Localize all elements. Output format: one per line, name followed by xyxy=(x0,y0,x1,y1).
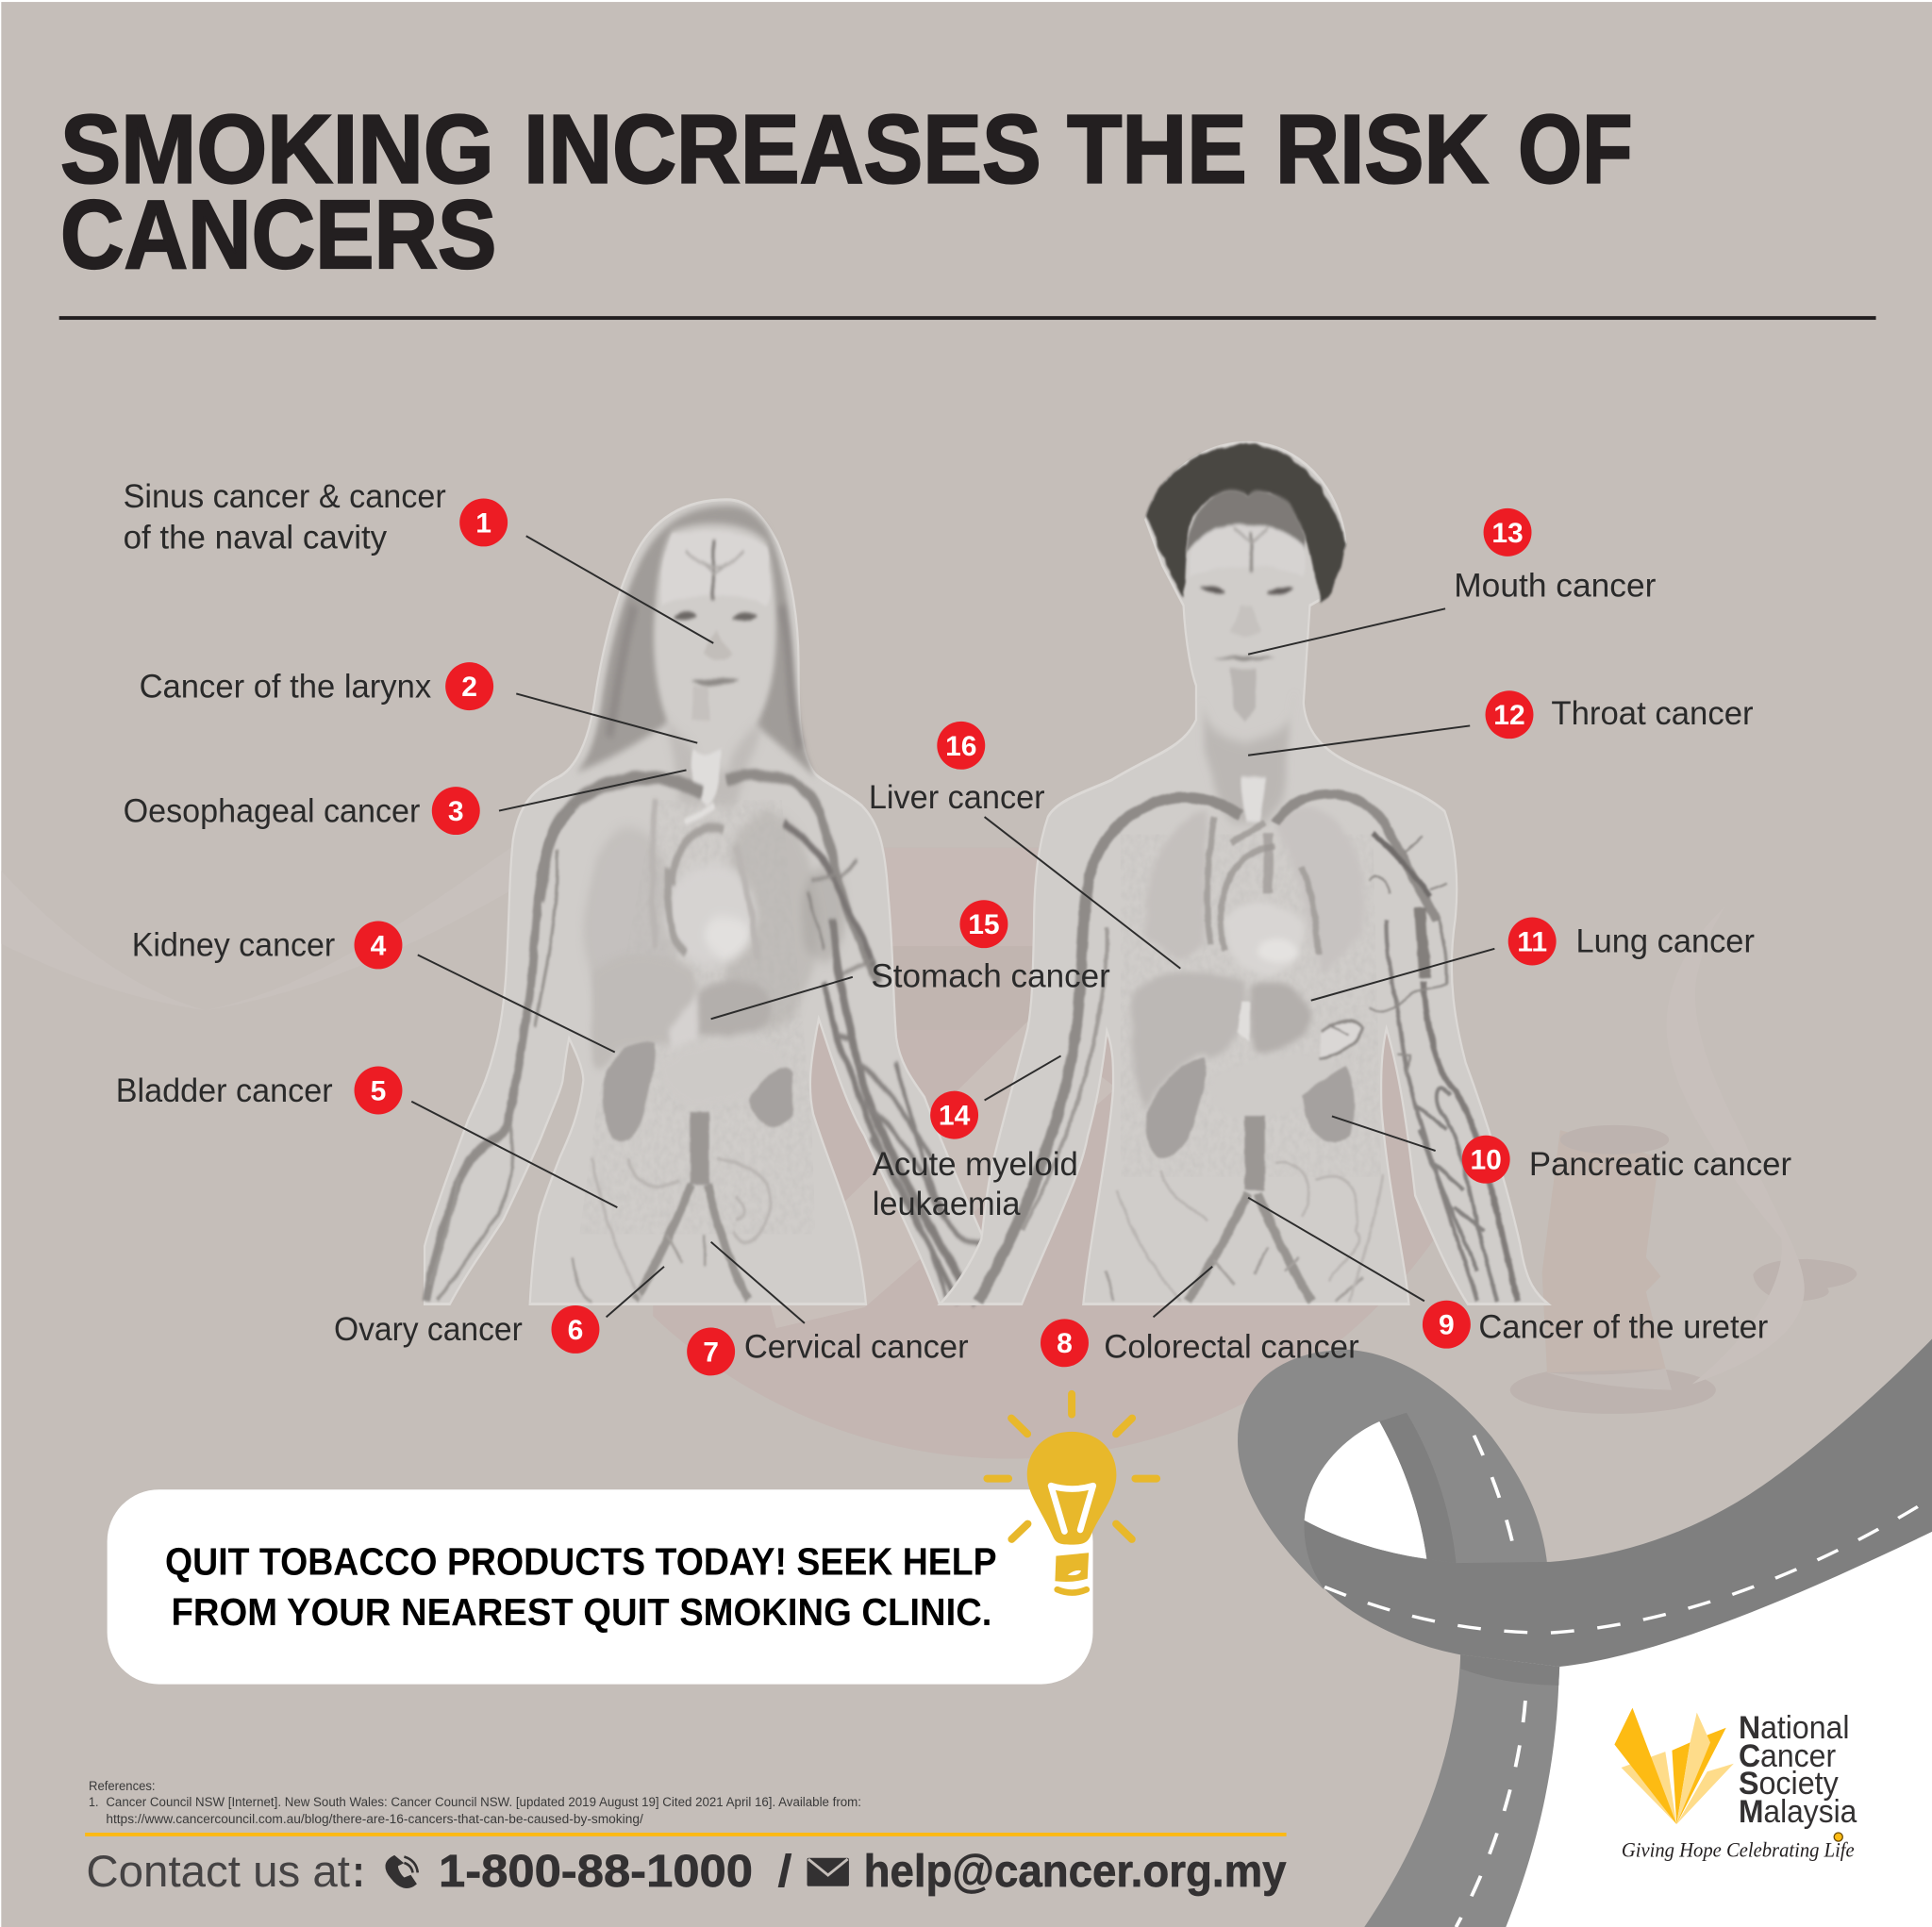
label 13: 13 xyxy=(1491,518,1524,549)
label 14: Acute myeloid xyxy=(873,1146,1078,1183)
lower road xyxy=(1364,1654,1559,1927)
label 5: 5 xyxy=(371,1075,386,1106)
male heart xyxy=(1224,903,1304,976)
male hair xyxy=(1146,443,1345,603)
label 13 xyxy=(1454,508,1657,604)
label 11: Lung cancer xyxy=(1576,923,1755,960)
road dashes xyxy=(1324,1436,1932,1927)
logo xyxy=(1614,1708,1857,1861)
callout xyxy=(108,1489,1093,1685)
label 9 xyxy=(1423,1301,1769,1349)
label 11 xyxy=(1508,918,1755,965)
male stomach xyxy=(1250,983,1312,1052)
label 16: 16 xyxy=(945,731,976,762)
label 4: Kidney cancer xyxy=(132,927,336,964)
label 10: Pancreatic cancer xyxy=(1529,1146,1791,1183)
female hair xyxy=(575,506,815,777)
title: OF xyxy=(1518,94,1633,203)
references: https://www.cancercouncil.com.au/blog/there-are-16-cancers-that-can-be-caused-by-smoking/ xyxy=(106,1811,643,1826)
label 9: Cancer of the ureter xyxy=(1478,1309,1769,1346)
background: coffee cup and steam xyxy=(1510,906,1857,1414)
label 13: Mouth cancer xyxy=(1454,567,1657,604)
label 5: Bladder cancer xyxy=(116,1072,333,1109)
label 7: 7 xyxy=(703,1337,719,1368)
label 7 xyxy=(687,1327,969,1375)
label 2: Cancer of the larynx xyxy=(140,668,432,705)
male lungs xyxy=(1143,809,1208,961)
callout: FROM YOUR NEAREST QUIT SMOKING CLINIC. xyxy=(172,1590,991,1634)
label 4 xyxy=(132,921,402,969)
leader lines xyxy=(411,536,1494,1323)
references: Cancer Council NSW [Internet]. New South Wales: Cancer Council NSW. [updated 2019 August 19] Cited 2021 April 16]. Available from: xyxy=(106,1794,861,1809)
references: References: xyxy=(89,1778,156,1793)
logo wordmark: Malaysia xyxy=(1739,1794,1857,1830)
title: INCREASES xyxy=(524,94,1041,203)
icon: light bulb xyxy=(987,1394,1157,1593)
title xyxy=(60,94,1633,289)
male pancreas xyxy=(1211,1052,1336,1119)
label 1 xyxy=(124,478,508,556)
label 1: 1 xyxy=(475,507,491,539)
road loop xyxy=(1238,1350,1547,1589)
male kidneys xyxy=(1145,1057,1207,1159)
female kidneys xyxy=(603,1042,655,1141)
label 15 xyxy=(871,900,1110,994)
logo wordmark: Cancer xyxy=(1739,1738,1836,1774)
title: SMOKING xyxy=(60,94,494,203)
female stomach xyxy=(698,981,772,1036)
background: smoke swoosh left xyxy=(1,846,512,1010)
female liver xyxy=(592,954,698,1069)
callout: QUIT TOBACCO PRODUCTS TODAY! SEEK HELP xyxy=(165,1539,997,1583)
contact bar: : xyxy=(353,1846,365,1896)
contact bar: help@cancer.org.my xyxy=(864,1846,1287,1897)
label 15: Stomach cancer xyxy=(871,957,1110,994)
title: RISK xyxy=(1275,94,1489,203)
male arm veins xyxy=(978,798,1241,1302)
female body figure xyxy=(425,500,988,1304)
label 3: 3 xyxy=(448,796,464,827)
label 3 xyxy=(124,787,480,835)
label 10: 10 xyxy=(1470,1145,1502,1176)
label 15: 15 xyxy=(968,909,1000,940)
label 16 xyxy=(869,722,1045,816)
logo tagline: Giving Hope Celebrating Life xyxy=(1622,1837,1855,1861)
label 9: 9 xyxy=(1439,1310,1455,1341)
label 6 xyxy=(334,1305,599,1354)
contact bar: 1-800-88-1000 xyxy=(439,1846,753,1897)
label 1: of the naval cavity xyxy=(124,519,387,556)
female pancreas xyxy=(660,1038,792,1107)
contact bar: Contact us at xyxy=(86,1846,350,1896)
label 6: Ovary cancer xyxy=(334,1311,523,1348)
references xyxy=(89,1778,861,1826)
label 5 xyxy=(116,1067,402,1115)
white corner xyxy=(1438,1493,1932,1927)
label 11: 11 xyxy=(1517,926,1547,957)
label 8: 8 xyxy=(1057,1328,1073,1359)
female lungs xyxy=(584,828,676,1022)
label 2: 2 xyxy=(461,672,477,703)
male arteries xyxy=(1226,1116,1283,1190)
label 8 xyxy=(1041,1319,1359,1367)
label 12: Throat cancer xyxy=(1551,695,1754,732)
label 12 xyxy=(1486,690,1754,739)
label 14: 14 xyxy=(939,1101,971,1132)
label 2 xyxy=(140,662,493,710)
female arteries xyxy=(672,1112,728,1185)
icon: envelope xyxy=(808,1858,849,1886)
label 14: leukaemia xyxy=(873,1186,1021,1222)
male body figure xyxy=(941,442,1548,1304)
female arm veins xyxy=(540,778,702,903)
background: faint no-smoking circle xyxy=(670,946,1355,1451)
label 14 xyxy=(873,1091,1078,1222)
icon: phone xyxy=(387,1856,418,1887)
label 12: 12 xyxy=(1493,700,1525,731)
contact bar: / xyxy=(777,1846,792,1897)
white hole in loop xyxy=(1305,1421,1426,1559)
road band xyxy=(1305,1337,1932,1667)
road ribbon xyxy=(1238,1337,1932,1927)
logo mark xyxy=(1614,1708,1734,1824)
label 16: Liver cancer xyxy=(869,779,1045,816)
label 1: Sinus cancer & cancer xyxy=(124,478,446,515)
logo wordmark: National xyxy=(1739,1710,1849,1746)
label 6: 6 xyxy=(568,1315,583,1346)
female heart xyxy=(666,863,755,966)
references: 1. xyxy=(89,1794,98,1809)
logo wordmark: Society xyxy=(1739,1766,1839,1802)
label 10 xyxy=(1462,1136,1791,1184)
title: THE xyxy=(1067,94,1247,203)
male liver xyxy=(1131,972,1246,1109)
contact bar xyxy=(86,1846,1287,1897)
title: CANCERS xyxy=(60,180,496,289)
label 4: 4 xyxy=(371,930,387,961)
label 7: Cervical cancer xyxy=(744,1328,969,1365)
label 8: Colorectal cancer xyxy=(1104,1328,1359,1365)
logo wordmark xyxy=(1739,1710,1857,1830)
label 3: Oesophageal cancer xyxy=(124,792,421,829)
